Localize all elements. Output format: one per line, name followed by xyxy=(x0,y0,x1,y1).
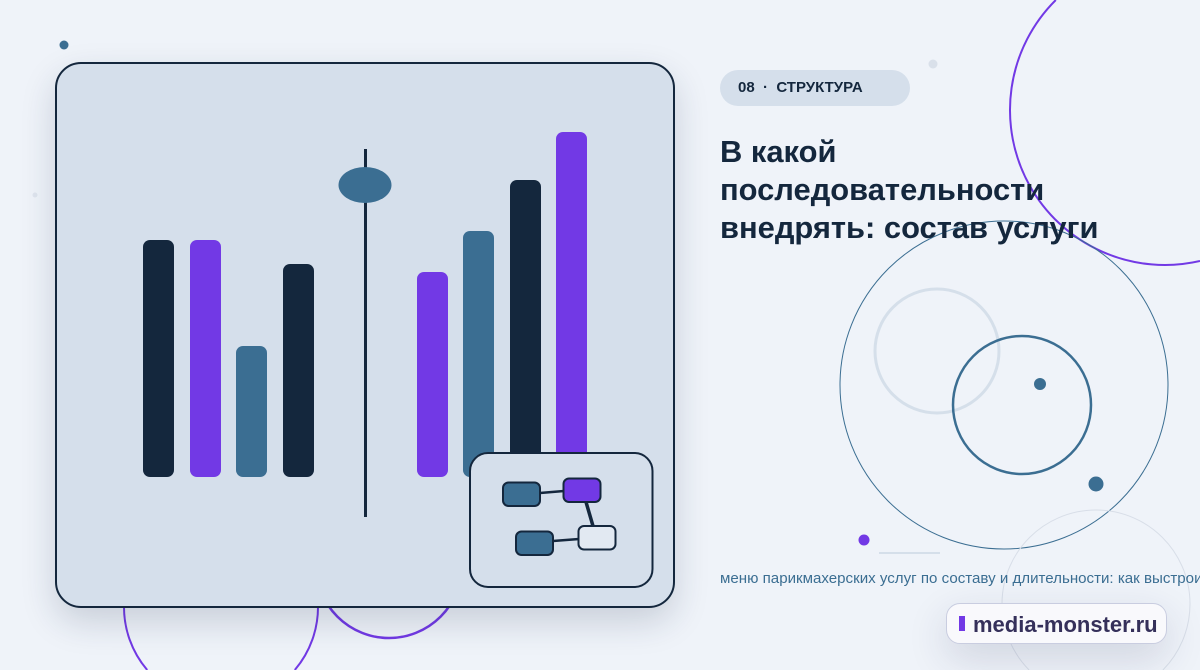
left bar 1 xyxy=(143,240,174,477)
panel: bar chart card xyxy=(55,62,675,608)
node: purple xyxy=(564,478,600,502)
right bar 4 xyxy=(556,132,587,477)
heading: В какой xyxy=(720,134,836,169)
section badge: 08 · СТРУКТУРА xyxy=(738,79,863,96)
left bar 3 xyxy=(236,346,267,477)
brand name: media-monster.ru xyxy=(973,612,1158,637)
chart: bars with divider and marker xyxy=(143,132,587,517)
icon: purple brand bar xyxy=(959,616,965,631)
right bar 1 xyxy=(417,272,448,477)
left bar 2 xyxy=(190,240,221,477)
heading: последовательности xyxy=(720,172,1044,207)
right bar 3 xyxy=(510,180,541,477)
node: blue top xyxy=(503,482,540,506)
marker ellipse xyxy=(338,167,392,203)
node: blue bottom xyxy=(516,532,553,555)
brand label xyxy=(946,603,1167,644)
connectors xyxy=(540,491,593,541)
heading xyxy=(720,134,1098,245)
right bar 2 xyxy=(463,231,494,477)
divider line xyxy=(364,149,367,517)
heading: внедрять: состав услуги xyxy=(720,210,1098,245)
node: light xyxy=(578,526,616,550)
left bar 4 xyxy=(283,264,314,477)
inset: flow diagram xyxy=(469,452,654,588)
section badge xyxy=(720,70,910,106)
